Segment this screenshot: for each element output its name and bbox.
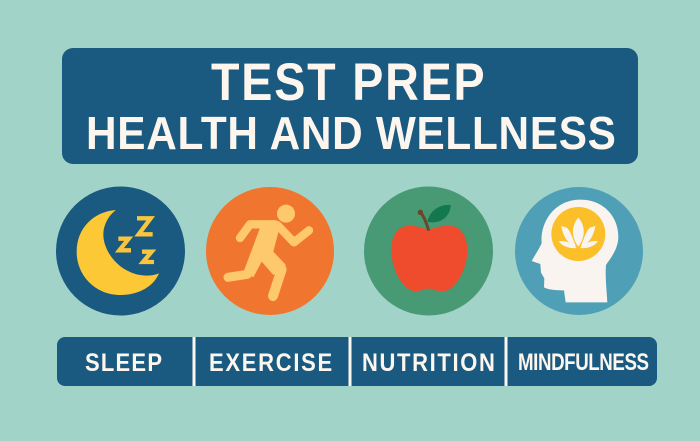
label: exercise: EXERCISE: [209, 349, 332, 376]
title banner: [62, 48, 638, 164]
title: test prep: TEST PREP: [211, 52, 485, 112]
subtitle: health and wellness: HEALTH AND WELLNESS: [86, 108, 616, 159]
icon: nutrition apple: [364, 186, 493, 316]
label: mindfulness: MINDFULNESS: [518, 349, 649, 376]
label: sleep: SLEEP: [85, 349, 162, 376]
icon: exercise runner: [206, 187, 334, 315]
label: nutrition: NUTRITION: [362, 349, 495, 376]
label bar: [57, 337, 657, 386]
icon: mindfulness head: [515, 187, 643, 315]
icon: sleep moon: [56, 186, 185, 316]
